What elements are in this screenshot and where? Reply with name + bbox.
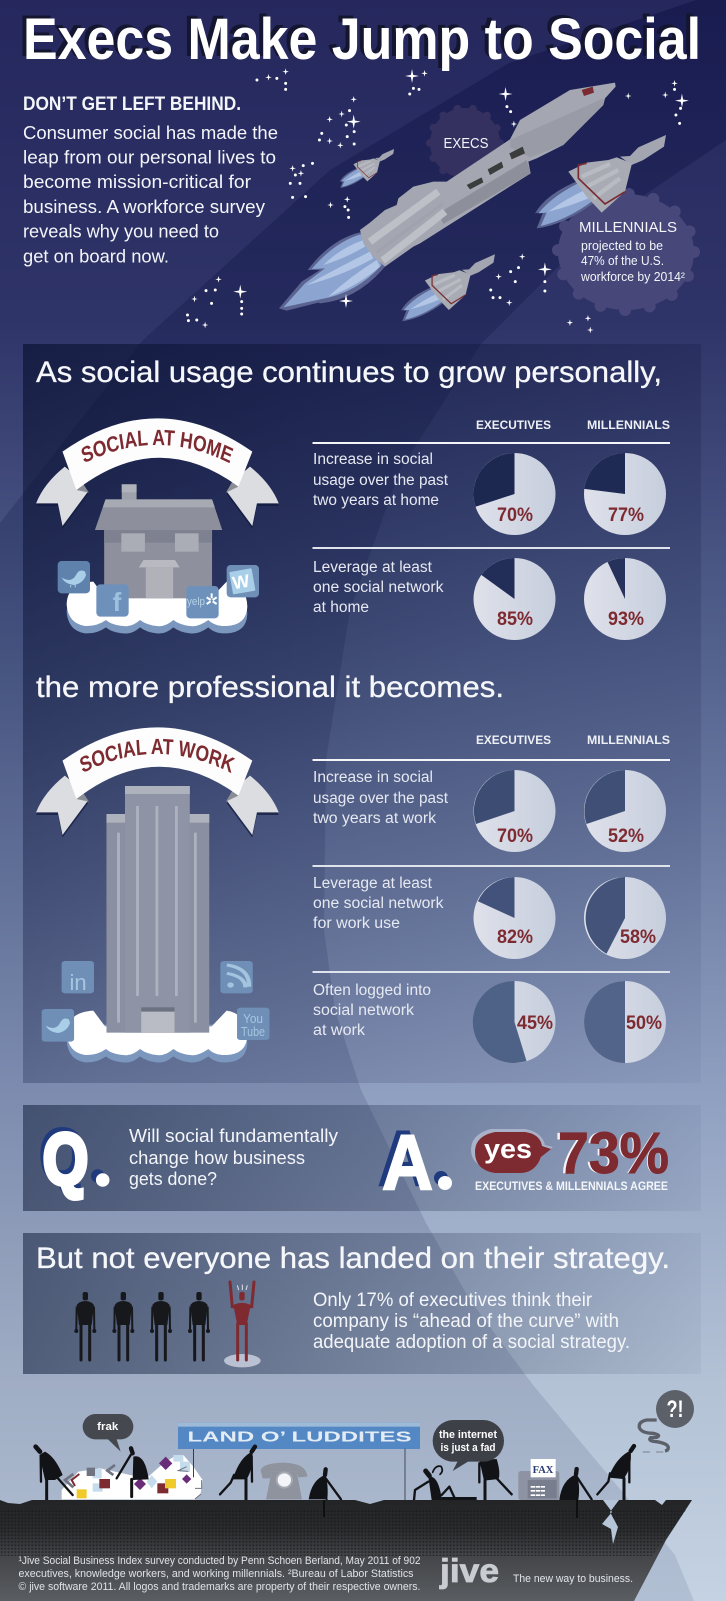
cloud xyxy=(67,582,247,634)
label: millennials projection: workforce by 2014² xyxy=(580,270,685,284)
column headers xyxy=(476,733,670,747)
sign post xyxy=(404,1448,406,1500)
figure: hunched sitting xyxy=(309,1469,341,1517)
land of luddites left scene xyxy=(36,1414,420,1517)
row text: increase at work xyxy=(313,769,449,827)
intro text block: get on board now. xyxy=(23,246,169,266)
crack xyxy=(602,1500,619,1544)
ribbon: social at home xyxy=(36,418,279,528)
badge: execs xyxy=(430,108,500,178)
pie: 52%: 52% xyxy=(608,826,644,847)
intro text block: Consumer social has made the xyxy=(23,123,278,143)
row text: leverage at home: Leverage at least xyxy=(313,559,433,576)
pie: 77% xyxy=(584,453,666,535)
speech bubble: yes: yes xyxy=(484,1134,532,1164)
ribbon: social at work: SOCIAL AT WORK xyxy=(80,738,236,774)
question text xyxy=(129,1125,339,1189)
row text: leverage for work xyxy=(313,875,444,932)
icon: rotary phone xyxy=(261,1463,307,1499)
icon: facebook xyxy=(96,584,129,617)
icon text: work marks: in xyxy=(69,970,87,995)
stat caption: EXECUTIVES & MILLENNIALS AGREE xyxy=(475,1181,668,1193)
pie: 93% xyxy=(584,558,666,640)
pie: 70%: 70% xyxy=(497,826,533,847)
question text: Will social fundamentally xyxy=(129,1125,339,1146)
rubble pile xyxy=(62,1455,203,1499)
question mark letter: Q xyxy=(43,1120,88,1200)
house xyxy=(95,484,222,598)
column headers: EXECUTIVES xyxy=(476,733,551,747)
heading: personal: As social usage continues to grow personally, xyxy=(36,356,662,389)
icon text: work marks xyxy=(69,970,265,1039)
figure: bent with arm down xyxy=(220,1447,255,1499)
strategy text: company is “ahead of the curve” with xyxy=(313,1311,619,1332)
figure: at the cliff edge xyxy=(597,1446,634,1500)
panel: strategy xyxy=(23,1233,701,1374)
row text: logged in: social network xyxy=(313,1002,414,1019)
label: millennials projection: 47% of the U.S. xyxy=(581,254,664,268)
intro text block: DON’T GET LEFT BEHIND. xyxy=(23,94,241,115)
answer letter: A xyxy=(382,1118,433,1206)
column headers: MILLENNIALS xyxy=(587,418,670,432)
label: millennials projection: projected to be xyxy=(581,239,663,253)
speech bubble: frak xyxy=(83,1414,133,1452)
scene text labels: ?! xyxy=(666,1396,684,1423)
column headers: MILLENNIALS xyxy=(587,733,670,747)
icon text: social marks: yelp xyxy=(187,596,205,608)
badge: millennials xyxy=(558,194,694,310)
pie: 77%: 77% xyxy=(608,505,644,526)
people figures xyxy=(74,1282,261,1367)
icon text: work marks: Tube xyxy=(241,1024,265,1039)
intro text block: business. A workforce survey xyxy=(23,197,265,217)
row text: leverage at home: at home xyxy=(313,599,369,616)
footnotes: executives, knowledge workers, and working millennials. ²Bureau of Labor Statistics xyxy=(18,1568,414,1580)
icon: youtube xyxy=(237,1008,269,1040)
icon: twitter xyxy=(42,1009,74,1042)
pie: 50%: 50% xyxy=(626,1013,662,1034)
ground cliff xyxy=(0,1500,692,1601)
strategy text: Only 17% of executives think their xyxy=(313,1290,593,1311)
row text: leverage for work: Leverage at least xyxy=(313,875,433,892)
pie: 70%: 70% xyxy=(497,505,533,526)
icon: twitter xyxy=(58,561,90,593)
pie: 45%: 45% xyxy=(517,1013,553,1034)
pie: 82%: 82% xyxy=(497,927,533,948)
pie: 58%: 58% xyxy=(620,927,656,948)
speech bubble: yes xyxy=(471,1129,553,1173)
figure: bent at far left xyxy=(36,1447,73,1499)
strategy text: adequate adoption of a social strategy. xyxy=(313,1332,630,1353)
rocket: left small xyxy=(340,149,394,188)
red figure with raised arms xyxy=(230,1282,254,1360)
icon text: work marks: You xyxy=(243,1011,263,1026)
question text: gets done? xyxy=(129,1168,217,1189)
sitting figure legs in ground xyxy=(324,1500,577,1518)
intro text block xyxy=(23,94,278,266)
row text: increase at work: usage over the past xyxy=(313,790,449,807)
answer letter: A xyxy=(378,1114,428,1202)
row text: increase at home: usage over the past xyxy=(313,472,449,489)
illustration: social at work xyxy=(42,786,269,1063)
row text: increase at work: two years at work xyxy=(313,810,436,827)
figure: hunched by fax xyxy=(559,1469,592,1518)
label: millennials projection xyxy=(579,219,685,284)
stat: 73%: 73% xyxy=(558,1121,669,1186)
figure: on the pile xyxy=(117,1448,149,1497)
bird on work icon xyxy=(46,1019,70,1033)
stars xyxy=(186,68,689,333)
row text: leverage at home xyxy=(313,559,444,616)
table: home xyxy=(312,418,670,640)
star over flame xyxy=(339,294,353,308)
table: work xyxy=(312,733,670,1063)
intro text block: become mission-critical for xyxy=(23,172,251,192)
icon text: social marks: W xyxy=(231,571,251,593)
ribbon: social at work xyxy=(36,727,279,838)
scene text labels: the internet xyxy=(439,1429,497,1441)
pie: 85%: 85% xyxy=(497,609,533,630)
icon text: social marks xyxy=(113,571,251,617)
scene text labels: FAX xyxy=(533,1465,554,1476)
question mark letter: Q xyxy=(40,1116,85,1196)
thought bubble xyxy=(656,1390,694,1428)
sign: land o luddites xyxy=(178,1423,420,1477)
tagline: The new way to business. xyxy=(513,1573,633,1585)
scene text labels: frak xyxy=(97,1421,119,1433)
row text: leverage at home: one social network xyxy=(313,579,444,596)
thought smoke xyxy=(639,1420,668,1452)
figure: bent behind bubble xyxy=(479,1459,512,1500)
label: millennials projection: MILLENNIALS xyxy=(579,219,677,236)
pie: 58% xyxy=(584,877,666,959)
icon: fax machine xyxy=(518,1459,559,1500)
rocket: right millennials xyxy=(535,135,666,228)
pie: 45% xyxy=(473,981,556,1063)
column headers xyxy=(476,418,670,432)
icon: wordpress xyxy=(227,565,259,597)
scene text labels: is just a fad xyxy=(440,1442,496,1454)
strategy text xyxy=(313,1290,630,1353)
ribbon: social at home: SOCIAL AT HOME xyxy=(82,430,234,464)
row text: leverage for work: for work use xyxy=(313,915,400,932)
cloud xyxy=(67,1011,247,1063)
pie: 52% xyxy=(584,770,666,852)
illustration: social at home xyxy=(58,484,259,634)
row text: increase at work: Increase in social xyxy=(313,769,433,786)
panel: social usage xyxy=(23,344,701,1083)
stat: 73%: 73% xyxy=(555,1121,668,1186)
footnotes: ¹Jive Social Business Index survey conducted by Penn Schoen Berland, May 2011 of 902 xyxy=(18,1555,420,1567)
row text: logged in: Often logged into xyxy=(313,982,431,999)
row text: logged in xyxy=(313,982,431,1039)
label: execs: EXECS xyxy=(444,135,488,152)
pie: 70% xyxy=(474,770,556,852)
scene text labels xyxy=(97,1396,683,1476)
land of luddites right scene xyxy=(404,1390,694,1518)
row text: increase at home: Increase in social xyxy=(313,451,433,468)
question text: change how business xyxy=(129,1147,305,1168)
row text: increase at home: two years at home xyxy=(313,492,439,509)
row text: logged in: at work xyxy=(313,1022,365,1039)
rockets xyxy=(279,83,666,321)
rocket: main execs xyxy=(279,83,616,311)
row text: increase at home xyxy=(313,451,449,509)
icon: yelp xyxy=(186,586,219,618)
heading: strategy: But not everyone has landed on their strategy. xyxy=(36,1242,670,1275)
footnotes xyxy=(18,1555,420,1593)
icon: linkedin xyxy=(62,961,94,993)
row text: leverage for work: one social network xyxy=(313,895,444,912)
intro text block: reveals why you need to xyxy=(23,222,219,242)
panel: question and answer xyxy=(23,1105,701,1211)
figure: on telephone xyxy=(414,1466,477,1502)
pie: 82% xyxy=(474,877,556,959)
icon: rss xyxy=(220,961,253,993)
heading: professional: the more professional it becomes. xyxy=(36,671,504,704)
icon text: social marks: f xyxy=(113,587,122,617)
scene text labels: LAND O’ LUDDITES xyxy=(188,1429,412,1446)
intro text block: leap from our personal lives to xyxy=(23,148,276,168)
pie: 85% xyxy=(474,558,556,640)
rocket: bottom small xyxy=(401,254,495,321)
pie: 50% xyxy=(584,981,666,1063)
footnotes: © jive software 2011. All logos and trademarks are property of their respective owners. xyxy=(18,1581,420,1593)
pie: 93%: 93% xyxy=(608,609,644,630)
column headers: EXECUTIVES xyxy=(476,418,551,432)
pie: 70% xyxy=(473,453,556,535)
logo: jive: jive xyxy=(439,1552,499,1589)
speech bubble: internet xyxy=(433,1420,504,1471)
tower xyxy=(106,786,209,1033)
